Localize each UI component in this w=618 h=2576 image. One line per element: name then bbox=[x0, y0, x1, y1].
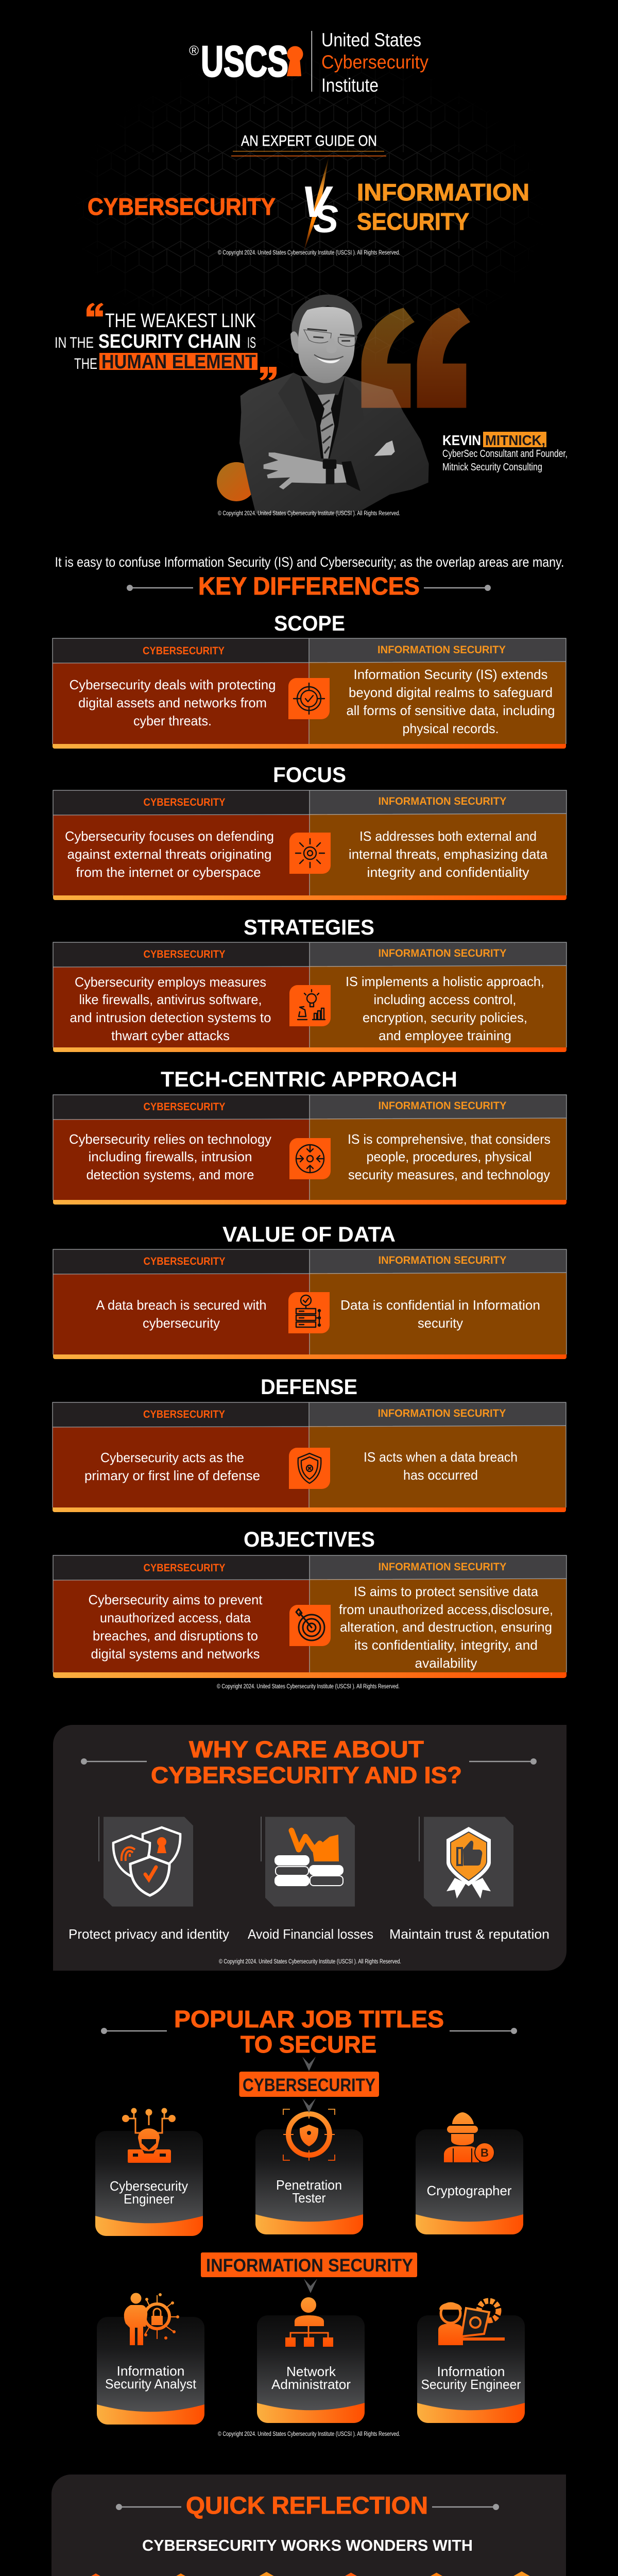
node: data encryption bbox=[317, 2573, 384, 2576]
card: penetration tester: Penetration bbox=[276, 2177, 342, 2193]
icon: large quote marks bbox=[362, 308, 470, 408]
card: network administrator bbox=[257, 2297, 365, 2423]
heading: why care about cybersecurity and is: WHY CARE ABOUT bbox=[189, 1736, 424, 1762]
node: multi-factor authentication bbox=[61, 2573, 143, 2576]
orange circle behind portrait bbox=[217, 462, 256, 501]
panel: tech-centric comparison: security measures, and technology bbox=[348, 1167, 550, 1182]
heading: key differences: KEY DIFFERENCES bbox=[198, 573, 420, 600]
icon: engineer with nodes bbox=[122, 2108, 176, 2163]
panel: strategies comparison: encryption, security policies, bbox=[363, 1010, 527, 1025]
panel: objectives comparison: Cybersecurity aims to prevent bbox=[89, 1592, 263, 1607]
title: cybersecurity vs information security bbox=[88, 156, 529, 253]
icon: target check bbox=[288, 678, 330, 719]
node: anti-malware software bbox=[398, 2573, 474, 2576]
panel: tech-centric comparison: detection systems, and more bbox=[87, 1167, 254, 1182]
heading: popular job titles to secure: POPULAR JOB TITLES bbox=[174, 2006, 444, 2032]
panel: strategies comparison: INFORMATION SECURITY bbox=[378, 947, 507, 959]
logo: USCSI header: United States bbox=[321, 29, 421, 50]
node: password policies bbox=[233, 2572, 300, 2576]
card: information security engineer: Security Engineer bbox=[421, 2377, 521, 2392]
card: maintain trust and reputation: Maintain trust & reputation bbox=[389, 1926, 550, 1942]
title: cybersecurity vs information security: CYBERSECURITY bbox=[88, 193, 276, 220]
card: protect privacy and identity: Protect privacy and identity bbox=[68, 1926, 229, 1942]
heading: why care about cybersecurity and is: CYBERSECURITY AND IS? bbox=[151, 1762, 462, 1788]
panel: defense comparison: has occurred bbox=[403, 1467, 478, 1483]
quote bbox=[55, 303, 277, 380]
card: cryptographer bbox=[416, 2112, 523, 2234]
panel: objectives comparison: digital systems and networks bbox=[91, 1646, 260, 1662]
quote: IS bbox=[247, 334, 256, 351]
subheading: cybersecurity works wonders with: CYBERSECURITY WORKS WONDERS WITH bbox=[142, 2536, 473, 2554]
heading: value of data: VALUE OF DATA bbox=[222, 1222, 396, 1246]
panel: focus comparison: IS addresses both external and bbox=[359, 828, 537, 844]
label: information security jobs: INFORMATION SECURITY bbox=[206, 2256, 413, 2276]
heading: strategies: STRATEGIES bbox=[244, 915, 374, 939]
panel: tech-centric comparison: people, procedures, physical bbox=[367, 1149, 531, 1164]
panel: scope comparison: Cybersecurity deals with protecting bbox=[69, 677, 276, 692]
panel: scope comparison: INFORMATION SECURITY bbox=[377, 644, 506, 656]
card: maintain trust and reputation bbox=[389, 1817, 550, 1942]
icon: trust badge bbox=[447, 1827, 491, 1899]
panel: value of data comparison: cybersecurity bbox=[143, 1315, 220, 1331]
card: protect privacy and identity bbox=[68, 1817, 229, 1942]
quote: HUMAN ELEMENT bbox=[101, 351, 256, 373]
icon: focus target bbox=[289, 833, 331, 874]
panel: strategies comparison: Cybersecurity employs measures bbox=[75, 974, 266, 990]
portrait: Kevin Mitnick bbox=[239, 295, 429, 514]
card: penetration tester bbox=[255, 2108, 363, 2234]
panel: objectives comparison: breaches, and disruptions to bbox=[93, 1628, 258, 1643]
logo: USCSI header: Institute bbox=[321, 75, 379, 96]
heading: scope: SCOPE bbox=[274, 611, 345, 635]
icon: admin with network bbox=[285, 2297, 333, 2347]
node: zero-trust architecture bbox=[147, 2573, 219, 2576]
panel: strategies comparison: and intrusion detection systems to bbox=[70, 1010, 271, 1025]
heading: popular job titles to secure bbox=[101, 2006, 517, 2058]
logo: USCSI header bbox=[189, 29, 428, 96]
panel: objectives comparison: availability bbox=[415, 1655, 477, 1671]
card: information security engineer: Information bbox=[437, 2364, 505, 2379]
icon: central gear arrows bbox=[289, 1138, 331, 1179]
node: secure code review bbox=[486, 2571, 557, 2576]
subtitle: an expert guide on: AN EXPERT GUIDE ON bbox=[241, 133, 377, 149]
panel: strategies comparison: and employee training bbox=[379, 1028, 511, 1043]
quote attribution bbox=[442, 432, 568, 473]
arrow bbox=[302, 2057, 316, 2071]
panel: defense comparison: CYBERSECURITY bbox=[143, 1409, 225, 1420]
icon: engineer laptop gear bbox=[438, 2301, 505, 2345]
card: information security analyst: Security Analyst bbox=[105, 2376, 197, 2392]
heading: objectives: OBJECTIVES bbox=[244, 1527, 375, 1551]
heading: focus: FOCUS bbox=[273, 762, 346, 787]
panel: scope comparison: CYBERSECURITY bbox=[143, 645, 225, 657]
panel: value of data comparison: INFORMATION SECURITY bbox=[378, 1255, 507, 1266]
title: cybersecurity vs information security: V bbox=[301, 178, 333, 227]
quote: IN THE bbox=[55, 334, 94, 351]
panel: tech-centric comparison: Cybersecurity relies on technology bbox=[69, 1131, 271, 1147]
panel: tech-centric comparison: IS is comprehensive, that considers bbox=[348, 1131, 551, 1147]
card: cybersecurity engineer: Engineer bbox=[124, 2191, 174, 2207]
panel: objectives comparison: its confidentiality, integrity, and bbox=[354, 1637, 538, 1653]
panel: value of data comparison bbox=[53, 1249, 566, 1359]
panel: defense comparison: IS acts when a data breach bbox=[364, 1449, 518, 1465]
panel: value of data comparison: CYBERSECURITY bbox=[143, 1256, 226, 1267]
panel: value of data comparison: Data is confidential in Information bbox=[340, 1297, 540, 1313]
panel: focus comparison: Cybersecurity focuses on defending bbox=[65, 828, 274, 844]
arrow bbox=[304, 2279, 317, 2293]
card: cryptographer: B bbox=[480, 2146, 489, 2159]
icon: server check bbox=[288, 1292, 330, 1333]
panel: defense comparison: INFORMATION SECURITY bbox=[378, 1408, 506, 1419]
panel: objectives comparison: CYBERSECURITY bbox=[143, 1562, 226, 1574]
panel: tech-centric comparison: including firewalls, intrusion bbox=[89, 1149, 252, 1164]
panel: objectives comparison bbox=[53, 1555, 566, 1678]
panel: why care bbox=[53, 1725, 566, 1971]
panel: strategies comparison bbox=[53, 942, 566, 1052]
card: avoid financial losses: Avoid Financial losses bbox=[248, 1926, 373, 1942]
panel: defense comparison: primary or first line of defense bbox=[84, 1468, 260, 1483]
copyright: © Copyright 2024. United States Cybersecurity Institute (USCSI ). All Rights Reserved. bbox=[218, 511, 400, 517]
panel: defense comparison bbox=[53, 1402, 566, 1512]
panel: strategies comparison: IS implements a holistic approach, bbox=[346, 974, 544, 989]
copyright: © Copyright 2024. United States Cybersecurity Institute (USCSI ). All Rights Reserved. bbox=[217, 1684, 400, 1690]
panel: strategies comparison: CYBERSECURITY bbox=[143, 948, 226, 960]
panel: focus comparison: integrity and confidentiality bbox=[367, 865, 529, 880]
icon: target dart bbox=[289, 1605, 331, 1646]
logo: USCSI header: Cybersecurity bbox=[321, 52, 428, 73]
panel: focus comparison: CYBERSECURITY bbox=[143, 796, 226, 808]
quote attribution: CyberSec Consultant and Founder, bbox=[442, 448, 568, 460]
icon: coins and down arrow bbox=[274, 1831, 344, 1886]
panel: focus comparison: INFORMATION SECURITY bbox=[378, 795, 507, 807]
copyright: © Copyright 2024. United States Cybersecurity Institute (USCSI ). All Rights Reserved. bbox=[219, 1959, 401, 1965]
arrow bbox=[302, 2098, 316, 2113]
quote attribution: MITNICK, bbox=[485, 432, 545, 448]
icon: shields bbox=[113, 1827, 180, 1895]
card: information security analyst: Information bbox=[116, 2363, 184, 2379]
card: cybersecurity engineer bbox=[95, 2108, 203, 2236]
copyright: © Copyright 2024. United States Cybersecurity Institute (USCSI ). All Rights Reserved. bbox=[218, 2431, 400, 2437]
quote: SECURITY CHAIN bbox=[98, 331, 241, 352]
card: network administrator: Administrator bbox=[271, 2377, 351, 2392]
card: penetration tester: Tester bbox=[293, 2190, 326, 2206]
panel: focus comparison: from the internet or cyberspace bbox=[76, 865, 261, 880]
panel: scope comparison bbox=[53, 638, 566, 749]
heading: popular job titles to secure: TO SECURE bbox=[241, 2031, 376, 2058]
icon: worker with bitcoin bbox=[444, 2112, 494, 2162]
heading: quick reflection: QUICK REFLECTION bbox=[186, 2492, 428, 2519]
card: cryptographer: Cryptographer bbox=[426, 2183, 512, 2198]
card: information security analyst bbox=[97, 2293, 204, 2425]
panel: objectives comparison: unauthorized access, data bbox=[100, 1610, 251, 1625]
panel: tech-centric comparison: INFORMATION SECURITY bbox=[378, 1100, 507, 1112]
heading: quick reflection bbox=[116, 2492, 499, 2519]
icon: shield crosshair bbox=[283, 2108, 335, 2161]
panel: objectives comparison: alteration, and destruction, ensuring bbox=[340, 1619, 552, 1635]
panel: tech-centric comparison: CYBERSECURITY bbox=[143, 1101, 226, 1113]
panel: focus comparison: against external threats originating bbox=[67, 846, 272, 862]
heading: defense: DEFENSE bbox=[261, 1375, 357, 1399]
icon: strategy bulb and chess bbox=[289, 985, 331, 1026]
panel: objectives comparison: IS aims to protect sensitive data bbox=[354, 1584, 539, 1599]
card: information security engineer bbox=[417, 2301, 525, 2423]
panel: scope comparison: beyond digital realms to safeguard bbox=[349, 685, 553, 700]
quote attribution: Mitnick Security Consulting bbox=[442, 462, 542, 473]
copyright: © Copyright 2024. United States Cybersecurity Institute (USCSI ). All Rights Reserved. bbox=[218, 250, 400, 256]
panel: scope comparison: digital assets and networks from bbox=[78, 695, 267, 710]
panel: scope comparison: all forms of sensitive data, including bbox=[346, 703, 555, 718]
heading: tech-centric approach: TECH-CENTRIC APPROACH bbox=[161, 1067, 457, 1091]
panel: objectives comparison: INFORMATION SECURITY bbox=[378, 1561, 507, 1573]
panel: tech-centric comparison bbox=[53, 1095, 566, 1205]
heading: key differences bbox=[127, 573, 491, 600]
panel: focus comparison: internal threats, emphasizing data bbox=[349, 846, 548, 862]
panel: strategies comparison: like firewalls, antivirus software, bbox=[79, 992, 262, 1007]
panel: scope comparison: Information Security (IS) extends bbox=[353, 667, 548, 682]
label: cybersecurity jobs: CYBERSECURITY bbox=[243, 2075, 375, 2095]
quote: THE WEAKEST LINK bbox=[105, 310, 256, 332]
card: cybersecurity engineer: Cybersecurity bbox=[110, 2178, 188, 2194]
panel: quick reflection bbox=[52, 2475, 566, 2576]
card: network administrator: Network bbox=[286, 2364, 336, 2379]
panel: defense comparison: Cybersecurity acts as the bbox=[100, 1450, 244, 1465]
title: cybersecurity vs information security: SECURITY bbox=[357, 208, 469, 235]
logo: USCSI header: ® bbox=[189, 43, 199, 58]
panel: value of data comparison: A data breach is secured with bbox=[96, 1297, 267, 1313]
panel: focus comparison bbox=[53, 790, 566, 900]
icon: analyst with lock bbox=[124, 2293, 179, 2345]
panel: scope comparison: physical records. bbox=[403, 721, 499, 736]
panel: objectives comparison: from unauthorized access,disclosure, bbox=[339, 1602, 553, 1617]
panel: strategies comparison: thwart cyber attacks bbox=[111, 1028, 230, 1043]
heading: why care about cybersecurity and is bbox=[81, 1736, 537, 1788]
icon: shield bbox=[289, 1448, 330, 1489]
panel: strategies comparison: including access control, bbox=[374, 992, 516, 1007]
panel: value of data comparison: security bbox=[418, 1315, 463, 1331]
quote attribution: KEVIN bbox=[442, 432, 481, 448]
title: cybersecurity vs information security: S bbox=[313, 197, 338, 241]
panel: scope comparison: cyber threats. bbox=[133, 713, 212, 728]
title: cybersecurity vs information security: INFORMATION bbox=[357, 179, 529, 206]
logo: USCSI header: USCS bbox=[201, 37, 288, 86]
quote: THE bbox=[74, 355, 97, 372]
card: avoid financial losses bbox=[248, 1817, 373, 1942]
